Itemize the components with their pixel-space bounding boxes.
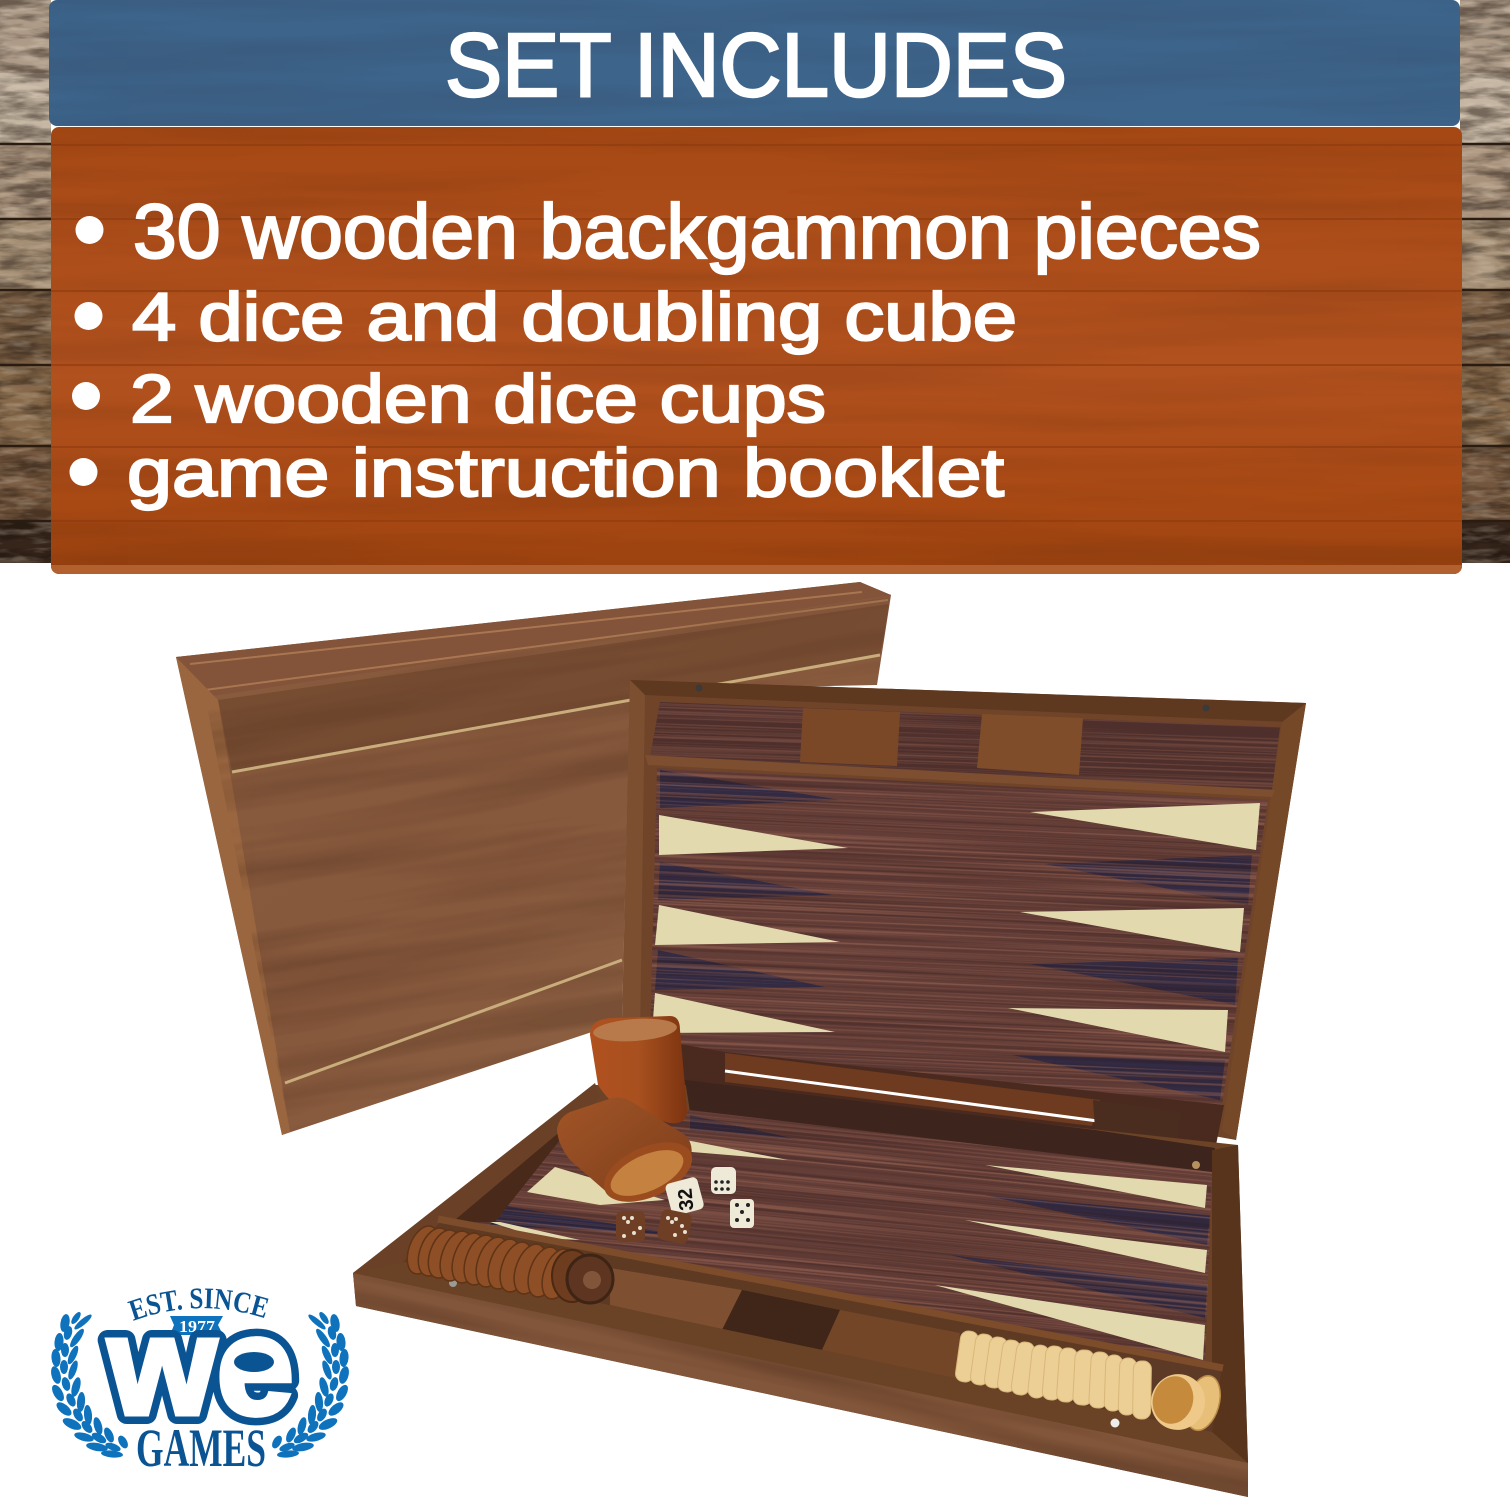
open board lid [622,680,1306,1143]
white die [730,1199,754,1228]
brown die [616,1211,645,1242]
standing dice cup [590,1016,687,1123]
storage compartment [650,702,1280,790]
front rim [353,1262,1248,1463]
base right side frame [1212,1145,1248,1463]
logo: WE Games [51,1287,349,1478]
case side edge [176,657,290,1135]
bullet item 3: 2 wooden dice cups [130,361,826,437]
inlay lines [232,655,880,1083]
year ribbon [170,1316,223,1336]
left wall [432,1100,590,1224]
brown die [656,1208,693,1245]
open board base [353,1080,1248,1497]
white die [711,1167,736,1194]
wood plank strips [0,0,1510,563]
lid lower rail and hinge [650,1040,1224,1150]
divider rail [438,1219,1223,1368]
lid playing field [650,768,1268,1105]
dice [616,1167,754,1245]
panel: contents list [51,127,1462,575]
year ribbon: 1977 [179,1317,216,1336]
doubling cube: 32 [675,1187,698,1211]
logo: WE Games: EST. SINCE [127,1288,268,1321]
closed case back [176,582,891,1135]
front face [353,1273,1248,1497]
cream points [652,803,1260,1052]
base playing field [474,1110,1212,1361]
laurel left [49,1311,130,1458]
checker tray [403,1222,1222,1432]
leather hinge band [685,1080,1215,1176]
we wordmark: we [107,1287,294,1444]
laurel right [270,1311,351,1458]
divider rail [645,755,1275,797]
est since [133,1308,270,1321]
we wordmark: we [107,1287,294,1444]
dark checkers [401,1222,613,1303]
case top edge [176,582,891,697]
title banner [49,0,1460,126]
bullet item 4: game instruction booklet [127,435,1004,511]
title: SET INCLUDES [445,16,1067,116]
games: GAMES [136,1418,266,1478]
bullet item 1: 30 wooden backgammon pieces [133,189,1261,275]
lying dice cup [557,1098,701,1214]
light checkers [954,1330,1226,1436]
bullet item 2: 4 dice and doubling cube [132,279,1017,355]
